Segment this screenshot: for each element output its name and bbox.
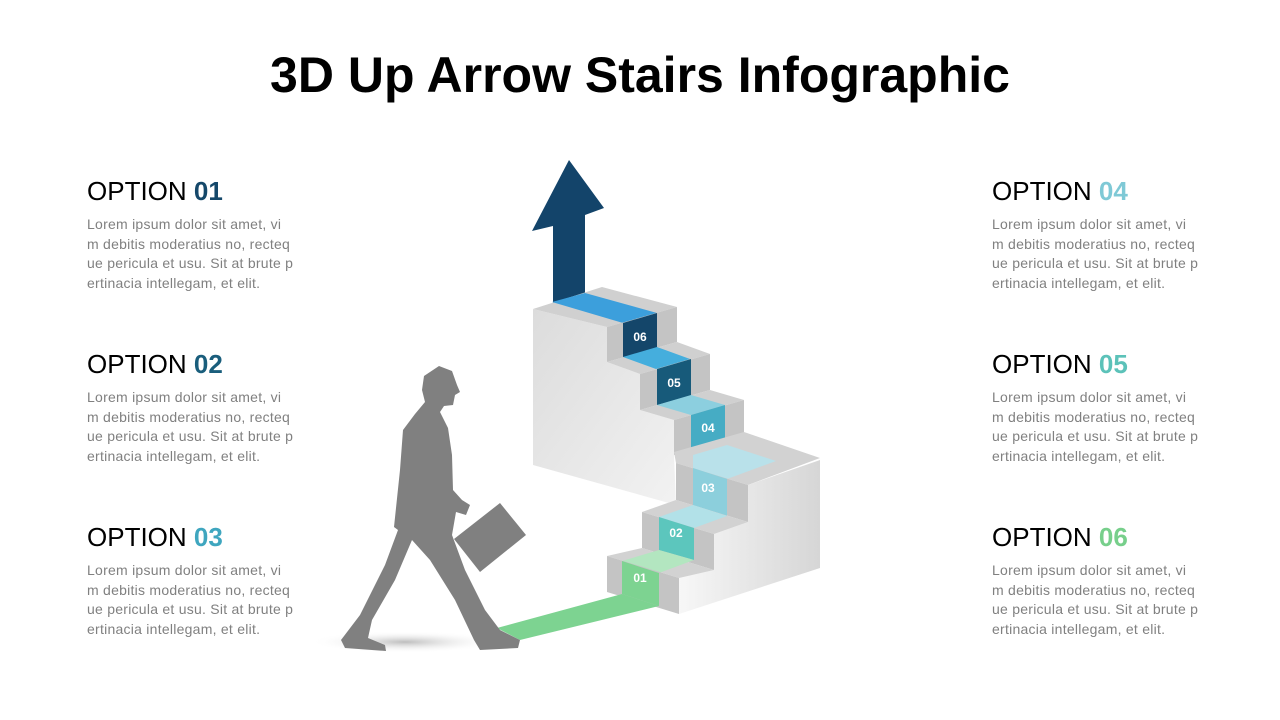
option 05: OPTION 05 bbox=[992, 349, 1128, 379]
title: 3D Up Arrow Stairs Infographic bbox=[270, 47, 1010, 103]
green path bbox=[497, 594, 659, 640]
option 03: OPTION 03 bbox=[87, 522, 223, 552]
option 06: OPTION 06 bbox=[992, 522, 1128, 552]
option 02 bbox=[87, 349, 293, 464]
option 01: m debitis moderatius no, recteq bbox=[87, 236, 290, 252]
option 01: Lorem ipsum dolor sit amet, vi bbox=[87, 216, 281, 232]
option 05 bbox=[992, 349, 1198, 464]
lower block: 03 bbox=[701, 481, 715, 495]
upper block bbox=[533, 287, 744, 505]
option 04: Lorem ipsum dolor sit amet, vi bbox=[992, 216, 1186, 232]
option 06: ertinacia intellegam, et elit. bbox=[992, 620, 1165, 636]
option 01: OPTION 01 bbox=[87, 176, 223, 206]
option 02: Lorem ipsum dolor sit amet, vi bbox=[87, 389, 281, 405]
arrow bbox=[532, 160, 604, 306]
option 06: Lorem ipsum dolor sit amet, vi bbox=[992, 562, 1186, 578]
man silhouette bbox=[341, 366, 526, 651]
upper block: 06 bbox=[633, 330, 647, 344]
option 03 bbox=[87, 522, 293, 637]
upper block: 04 bbox=[701, 421, 715, 435]
lower block bbox=[607, 432, 820, 614]
option 04: ertinacia intellegam, et elit. bbox=[992, 274, 1165, 290]
option 05: m debitis moderatius no, recteq bbox=[992, 408, 1195, 424]
option 04: m debitis moderatius no, recteq bbox=[992, 236, 1195, 252]
option 01: ertinacia intellegam, et elit. bbox=[87, 274, 260, 290]
lower block: 02 bbox=[669, 526, 683, 540]
illustration: stairs with arrow and man bbox=[310, 160, 820, 653]
option 03: ertinacia intellegam, et elit. bbox=[87, 620, 260, 636]
option 03: ue pericula et usu. Sit at brute p bbox=[87, 601, 293, 617]
option 05: ertinacia intellegam, et elit. bbox=[992, 448, 1165, 464]
option 04: OPTION 04 bbox=[992, 176, 1128, 206]
option 02: ue pericula et usu. Sit at brute p bbox=[87, 428, 293, 444]
option 02: m debitis moderatius no, recteq bbox=[87, 408, 290, 424]
option 04 bbox=[992, 176, 1198, 291]
option 02: OPTION 02 bbox=[87, 349, 223, 379]
option 06: ue pericula et usu. Sit at brute p bbox=[992, 601, 1198, 617]
option 03: m debitis moderatius no, recteq bbox=[87, 582, 290, 598]
option 06 bbox=[992, 522, 1198, 637]
upper block: 05 bbox=[667, 376, 681, 390]
option 04: ue pericula et usu. Sit at brute p bbox=[992, 255, 1198, 271]
option 01 bbox=[87, 176, 293, 291]
lower block: 01 bbox=[633, 571, 647, 585]
option 02: ertinacia intellegam, et elit. bbox=[87, 448, 260, 464]
shadow bbox=[310, 631, 500, 653]
option 03: Lorem ipsum dolor sit amet, vi bbox=[87, 562, 281, 578]
option 06: m debitis moderatius no, recteq bbox=[992, 582, 1195, 598]
option 01: ue pericula et usu. Sit at brute p bbox=[87, 255, 293, 271]
option 05: ue pericula et usu. Sit at brute p bbox=[992, 428, 1198, 444]
option 05: Lorem ipsum dolor sit amet, vi bbox=[992, 389, 1186, 405]
